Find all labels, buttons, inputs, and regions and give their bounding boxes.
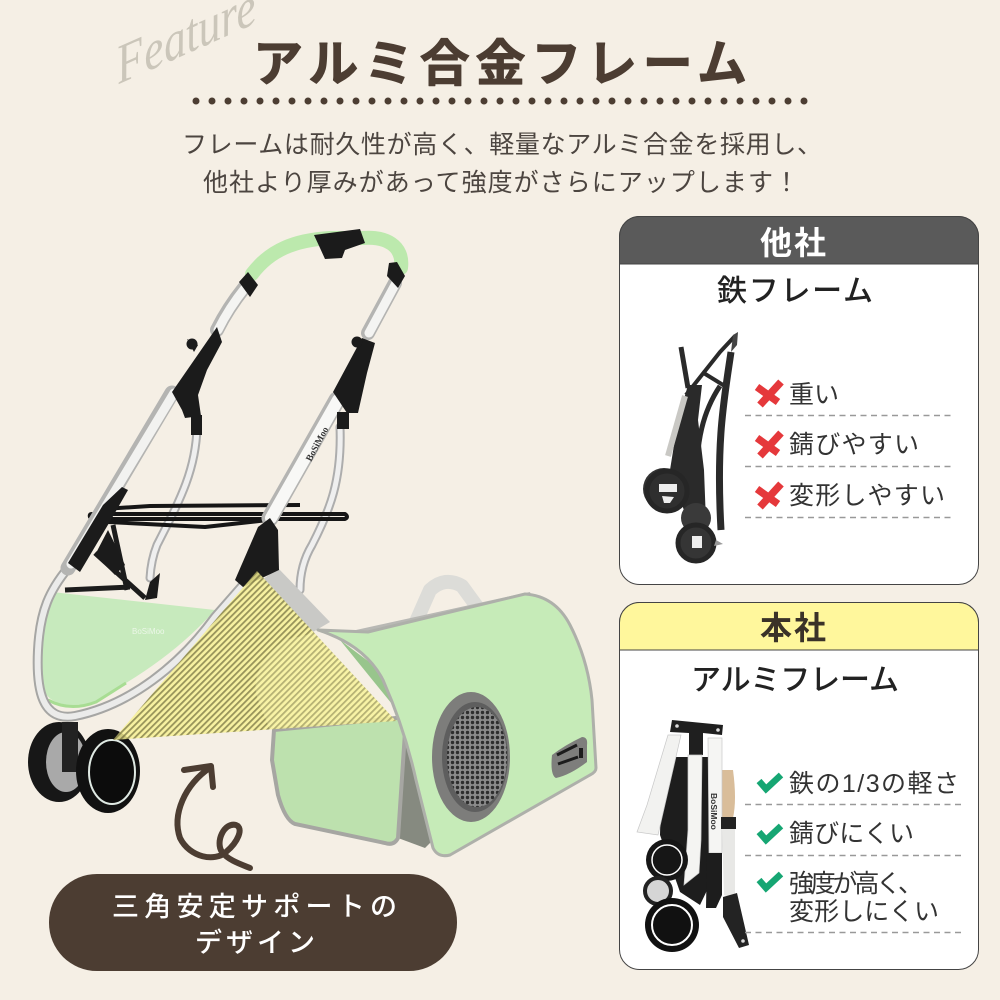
callout text (112, 892, 397, 958)
panel body (620, 602, 978, 970)
panel body (620, 216, 978, 584)
brand on seat: BoSiMoo (132, 627, 165, 636)
intro text: フレームは耐久性が高く、軽量なアルミ合金を採用し、 (182, 131, 822, 159)
photo: green carrier bag (272, 582, 596, 856)
main frame rail (38, 283, 396, 717)
subheading: アルミフレーム (691, 664, 899, 697)
header bar (620, 216, 978, 264)
item: strong and rigid: 強度が高く、 (789, 870, 923, 898)
wheels (28, 722, 140, 813)
seat bracket (262, 568, 330, 632)
black fittings (68, 229, 405, 600)
panel: our company (620, 602, 978, 970)
list: steel drawbacks (745, 381, 952, 518)
callout text: 三角安定サポートの (112, 892, 397, 922)
item: rusts easily: 錆びやすい (789, 431, 919, 459)
carrier front panel (272, 717, 406, 844)
arrow: curly pointer (178, 766, 250, 868)
header label: 本社 (760, 610, 828, 646)
green handle (252, 238, 401, 274)
photo: folded aluminium stroller (637, 720, 749, 952)
list: aluminium benefits (745, 770, 962, 932)
item: one third the weight: 鉄の1/3の軽さ (789, 770, 959, 798)
rear struts (150, 427, 340, 590)
side pocket tag (552, 737, 587, 778)
item: heavy: 重い (789, 381, 839, 409)
photo: stroller frame (28, 229, 405, 813)
header bar (620, 602, 978, 650)
callout text: デザイン (195, 928, 315, 958)
callout: triangle support design (49, 874, 457, 971)
storage rack (90, 505, 347, 527)
header label: 他社 (760, 225, 828, 261)
brand on tube: BoSiMoo (709, 793, 719, 830)
item: heavy (757, 381, 839, 409)
carrier handle (415, 582, 478, 624)
stroller seat (40, 592, 215, 705)
translucent light patch (256, 632, 396, 730)
carrier top trim (356, 592, 533, 640)
stability triangle highlight (113, 571, 396, 740)
item: deforms easily: 変形しやすい (789, 482, 945, 510)
dotted divider (192, 98, 808, 104)
lower left struts (65, 525, 145, 598)
photo: folded steel stroller (643, 332, 738, 561)
title: アルミ合金フレーム (253, 36, 747, 92)
vent ring (432, 692, 510, 822)
vent mesh (447, 707, 507, 807)
intro text: 他社より厚みがあって強度がさらにアップします！ (203, 169, 799, 197)
subheading: 鉄フレーム (717, 275, 873, 308)
item: strong and rigid (759, 870, 939, 926)
panel: other company (620, 216, 978, 584)
callout pill (49, 874, 457, 971)
item: strong and rigid: 変形しにくい (789, 898, 939, 926)
intro text (182, 131, 822, 197)
carrier main shell (318, 594, 596, 856)
brand on main tube: BoSiMoo (305, 425, 331, 463)
carrier inner shadow (340, 640, 425, 838)
item: resists rust: 錆びにくい (789, 820, 914, 848)
